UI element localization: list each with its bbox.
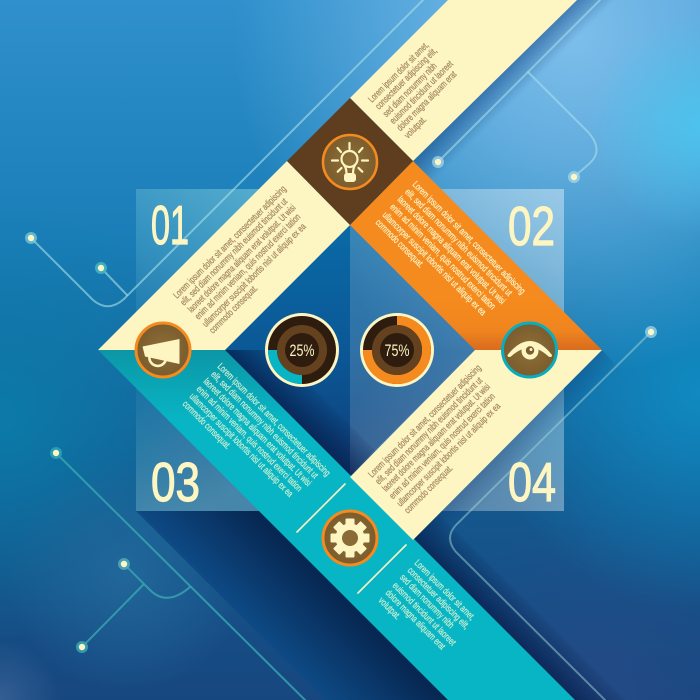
text block: top-right cream band	[366, 40, 459, 141]
text block: upper-left cream band: elit, sed diam nonummy nibh euismod tincidunt ut	[178, 196, 290, 308]
text block: teal band lower: Lorem ipsum dolor sit amet,	[412, 558, 477, 623]
text block: lower-right cream band	[366, 363, 503, 516]
text block: top-right cream band: volutpat.	[402, 114, 429, 141]
text block: orange band: elit, sed diam nonummy nibh euismod tincidunt ut	[402, 187, 514, 299]
panel 02 backdrop	[350, 189, 564, 350]
donut chart 75%	[360, 313, 434, 387]
band: top-right cream	[350, 0, 577, 161]
text block: upper-left cream band: laoreet dolore magna aliquam erat volutpat. Ut wisi	[186, 203, 298, 315]
number 03: 03	[151, 451, 200, 513]
donut chart 25%	[265, 313, 339, 387]
text block: top-right cream band: sed diam nonummy nibh	[381, 61, 440, 120]
text block: teal band upper: Lorem ipsum dolor sit amet, consectetuer adipiscing	[215, 361, 332, 479]
circuit lines lower left	[56, 453, 305, 700]
text block: orange band: commodo consequat.	[373, 217, 426, 270]
number 01: 01	[151, 194, 189, 256]
icon: light bulb	[323, 135, 377, 189]
band: upper-left cream	[98, 161, 350, 350]
text block: upper-left cream band: commodo consequat.	[207, 283, 260, 336]
text block: lower-right cream band: Lorem ipsum dolor sit amet, consectetuer adipiscing	[366, 363, 484, 480]
text block: orange band	[373, 179, 527, 318]
text block: top-right cream band: consectetuer adipiscing elit,	[373, 46, 440, 112]
long shadow under teal band	[136, 511, 448, 700]
text block: lower-right cream band: commodo consequat.	[402, 463, 455, 516]
shadow right of top cream band	[413, 0, 620, 185]
text block: teal band upper	[180, 361, 332, 500]
text block: upper-left cream band: enim ad minim veniam, quis nostrud exerci tation	[193, 212, 303, 322]
text block: teal band lower: volutpat.	[376, 595, 403, 622]
panel: center diamond backdrop	[225, 225, 475, 475]
text block: upper-left cream band: ullamcorper suscipit lobortis nisl ut aliquip ex ea	[200, 221, 309, 330]
text block: lower-right cream band: laoreet dolore magna aliquam erat volutpat. Ut wisi	[380, 382, 493, 494]
text block: top-right cream band: dolore magna aliquam erat	[395, 69, 459, 134]
band: orange	[350, 161, 602, 350]
text block: orange band: Lorem ipsum dolor sit amet, consectetuer adipiscing	[410, 179, 527, 297]
band: teal	[98, 350, 575, 700]
text block: upper-left cream band	[171, 184, 309, 336]
text block: lower-right cream band: elit, sed diam nonummy nibh euismod tincidunt ut	[373, 375, 485, 487]
text block: teal band upper: elit, sed diam nonummy nibh euismod tincidunt ut	[208, 369, 320, 481]
donut chart 75%: 75%	[384, 341, 410, 360]
donut chart 25%: 25%	[290, 341, 314, 360]
text block: teal band lower: consectetuer adipiscing elit,	[405, 565, 471, 632]
divider lines on teal band	[297, 484, 406, 593]
text block: orange band: ullamcorper suscipit lobortis nisl ut aliquip ex ea	[380, 210, 488, 318]
panel 03 backdrop	[136, 385, 262, 511]
text block: orange band: laoreet dolore magna aliquam erat volutpat. Ut wisi	[395, 194, 507, 307]
panel 04 backdrop	[350, 350, 564, 511]
text block: teal band lower: sed diam nonummy nibh	[397, 572, 456, 631]
panel 01 backdrop	[136, 189, 262, 315]
brown diamond	[287, 98, 413, 225]
number 04: 04	[508, 451, 556, 513]
shadow right of teal band	[225, 350, 625, 700]
text block: teal band lower: dolore magna aliquam erat	[383, 588, 447, 652]
text block: top-right cream band: Lorem ipsum dolor sit amet,	[366, 40, 431, 105]
text block: orange band: enim ad minim veniam, quis nostrud exerci tation	[387, 202, 498, 312]
text block: teal band upper: enim ad minim veniam, quis nostrud exerci tation	[194, 384, 304, 494]
band: lower-right cream	[350, 350, 602, 540]
text block: teal band lower	[376, 558, 477, 652]
text block: teal band upper: laoreet dolore magna aliquam erat volutpat. Ut wisi	[201, 376, 313, 489]
icon: eye	[502, 323, 556, 377]
shadow below lower cream band	[413, 350, 625, 560]
text block: top-right cream band: euismod tincidunt ut laoreet	[388, 59, 456, 127]
circuit dots	[25, 156, 657, 653]
text block: lower-right cream band: enim ad minim veniam, quis nostrud exerci tation	[387, 391, 498, 502]
icon: megaphone	[136, 323, 190, 377]
number 02: 02	[508, 195, 555, 257]
text block: teal band upper: commodo consequat.	[180, 399, 233, 452]
icon: gear	[323, 511, 377, 565]
text block: teal band upper: ullamcorper suscipit lobortis nisl ut aliquip ex ea	[187, 391, 295, 500]
text block: teal band lower: euismod tincidunt ut laoreet	[390, 580, 458, 648]
text block: lower-right cream band: ullamcorper suscipit lobortis nisl ut aliquip ex ea	[395, 401, 503, 509]
text block: upper-left cream band: Lorem ipsum dolor sit amet, consectetuer adipiscing	[171, 184, 289, 301]
